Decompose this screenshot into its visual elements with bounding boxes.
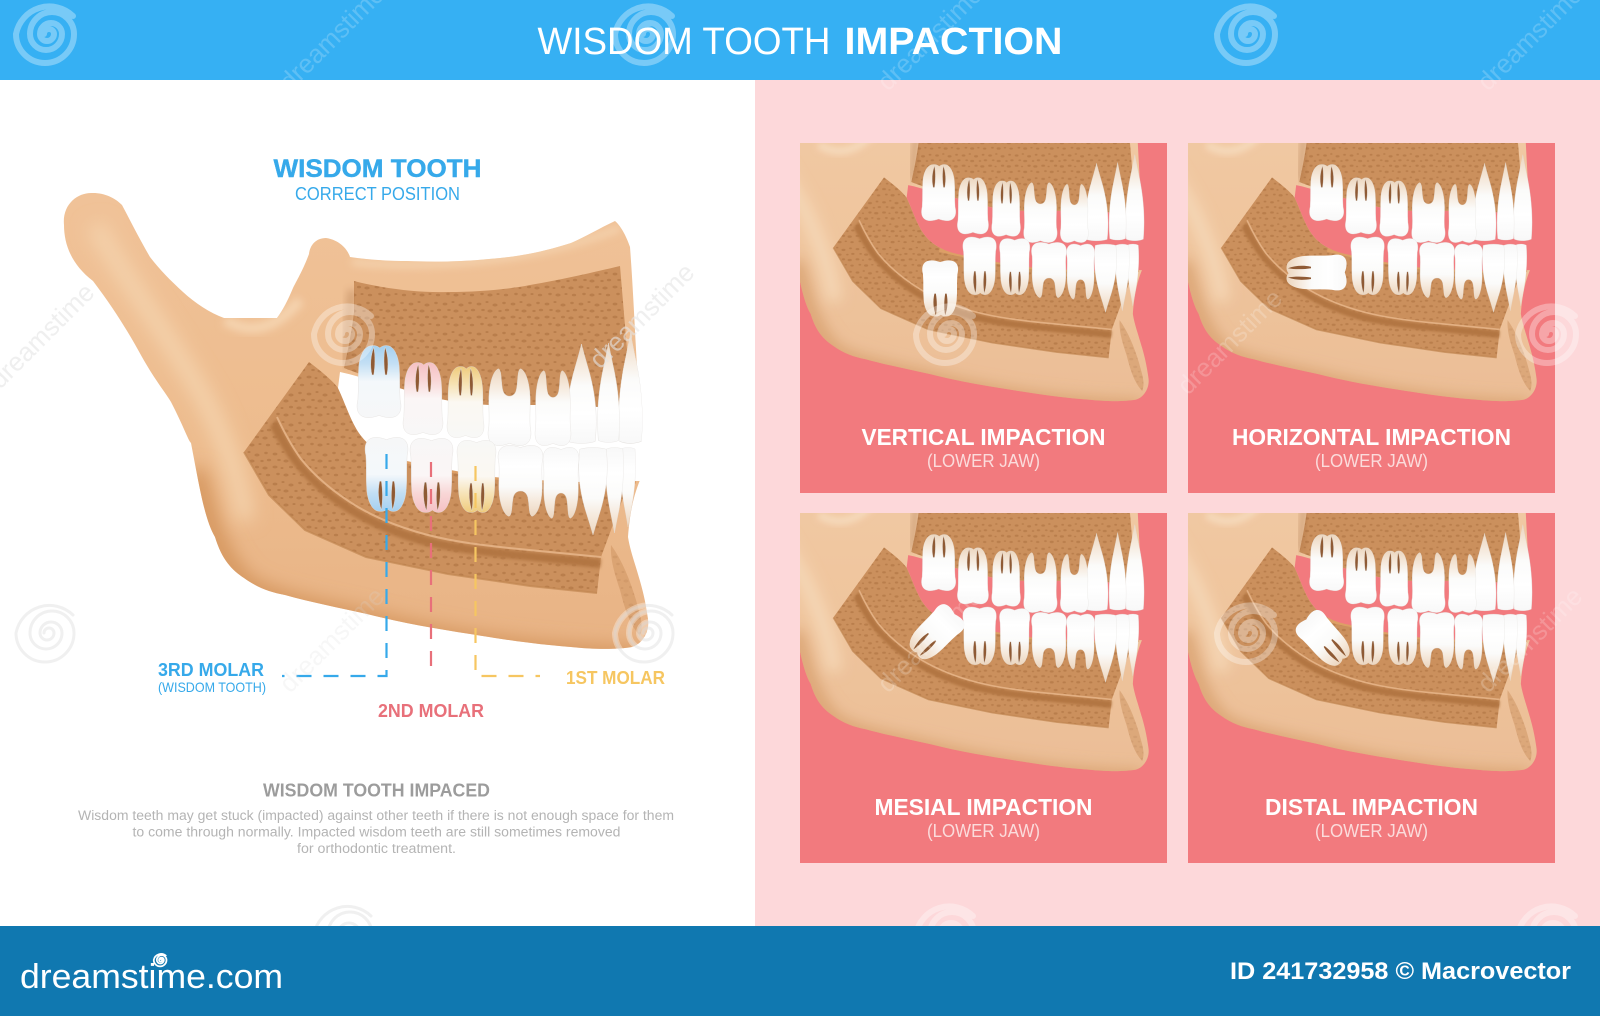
panel subtitle: (LOWER JAW) <box>927 821 1040 841</box>
panel subtitle: (LOWER JAW) <box>927 451 1040 471</box>
footer bar <box>0 926 1600 1016</box>
text block: wisdom tooth impaced: WISDOM TOOTH IMPACED <box>263 780 490 800</box>
leader line: 3rd molar <box>282 454 386 676</box>
label: 3rd molar: 3RD MOLAR <box>158 660 264 680</box>
lower 2nd molar <box>410 438 453 512</box>
upper 3rd molar <box>357 346 401 418</box>
panel title: DISTAL IMPACTION <box>1265 794 1478 820</box>
header title <box>538 21 1062 63</box>
header title: IMPACTION <box>844 21 1062 63</box>
panel subtitle: (LOWER JAW) <box>1315 451 1428 471</box>
jaw with mesially impacted tooth <box>693 415 1189 778</box>
label: wisdom tooth note: (WISDOM TOOTH) <box>158 679 266 695</box>
text block: wisdom tooth impaced: Wisdom teeth may get stuck (impacted) against other teeth if there is not enough space for them <box>78 808 674 823</box>
upper 2nd molar <box>403 363 443 435</box>
watermark words: dreamstime <box>1471 581 1588 698</box>
watermark words: dreamstime <box>871 581 988 698</box>
label: 2nd molar: 2ND MOLAR <box>378 701 484 721</box>
jaw with vertically impacted tooth <box>693 45 1189 408</box>
watermark words <box>0 0 1588 698</box>
footer logo: dreamstime.com: dreamstime.com <box>20 958 283 996</box>
panel title: HORIZONTAL IMPACTION <box>1232 424 1511 450</box>
panel: mesial impaction <box>800 513 1167 863</box>
main jaw illustration: correct position <box>64 193 700 658</box>
panel title: VERTICAL IMPACTION <box>862 424 1106 450</box>
right background <box>755 80 1600 926</box>
heading: wisdom tooth: WISDOM TOOTH <box>274 155 482 183</box>
jaw with horizontally impacted tooth <box>1081 45 1577 408</box>
header title: WISDOM TOOTH <box>538 21 830 63</box>
panel title: MESIAL IMPACTION <box>874 794 1092 820</box>
panel: horizontal impaction <box>1188 143 1555 493</box>
jaw with distally impacted tooth <box>1081 415 1577 778</box>
left background <box>0 80 755 926</box>
watermark words: dreamstime <box>273 581 390 698</box>
lower 3rd molar <box>365 437 408 511</box>
footer credit: ID 241732958 © Macrovector <box>1230 958 1571 985</box>
text block: wisdom tooth impaced: to come through normally. Impacted wisdom teeth are still sometimes removed <box>132 824 620 840</box>
watermark words: dreamstime <box>1171 283 1288 400</box>
panel subtitle: (LOWER JAW) <box>1315 821 1428 841</box>
leader line: 2nd molar <box>430 462 432 674</box>
lower 1st molar <box>457 440 496 512</box>
label: 1st molar: 1ST MOLAR <box>566 668 665 688</box>
panel background <box>800 143 1167 493</box>
leader line: 1st molar <box>476 466 540 676</box>
panel: distal impaction <box>1188 513 1555 863</box>
panel background <box>800 513 1167 863</box>
upper 1st molar <box>447 367 484 438</box>
text block: wisdom tooth impaced <box>78 780 674 856</box>
panel background <box>1188 143 1555 493</box>
header bar <box>0 0 1600 80</box>
panel: vertical impaction <box>800 143 1167 493</box>
panel background <box>1188 513 1555 863</box>
watermark words: dreamstime <box>583 257 700 374</box>
text block: wisdom tooth impaced: for orthodontic treatment. <box>297 841 456 856</box>
subheading: correct position: CORRECT POSITION <box>295 184 460 204</box>
